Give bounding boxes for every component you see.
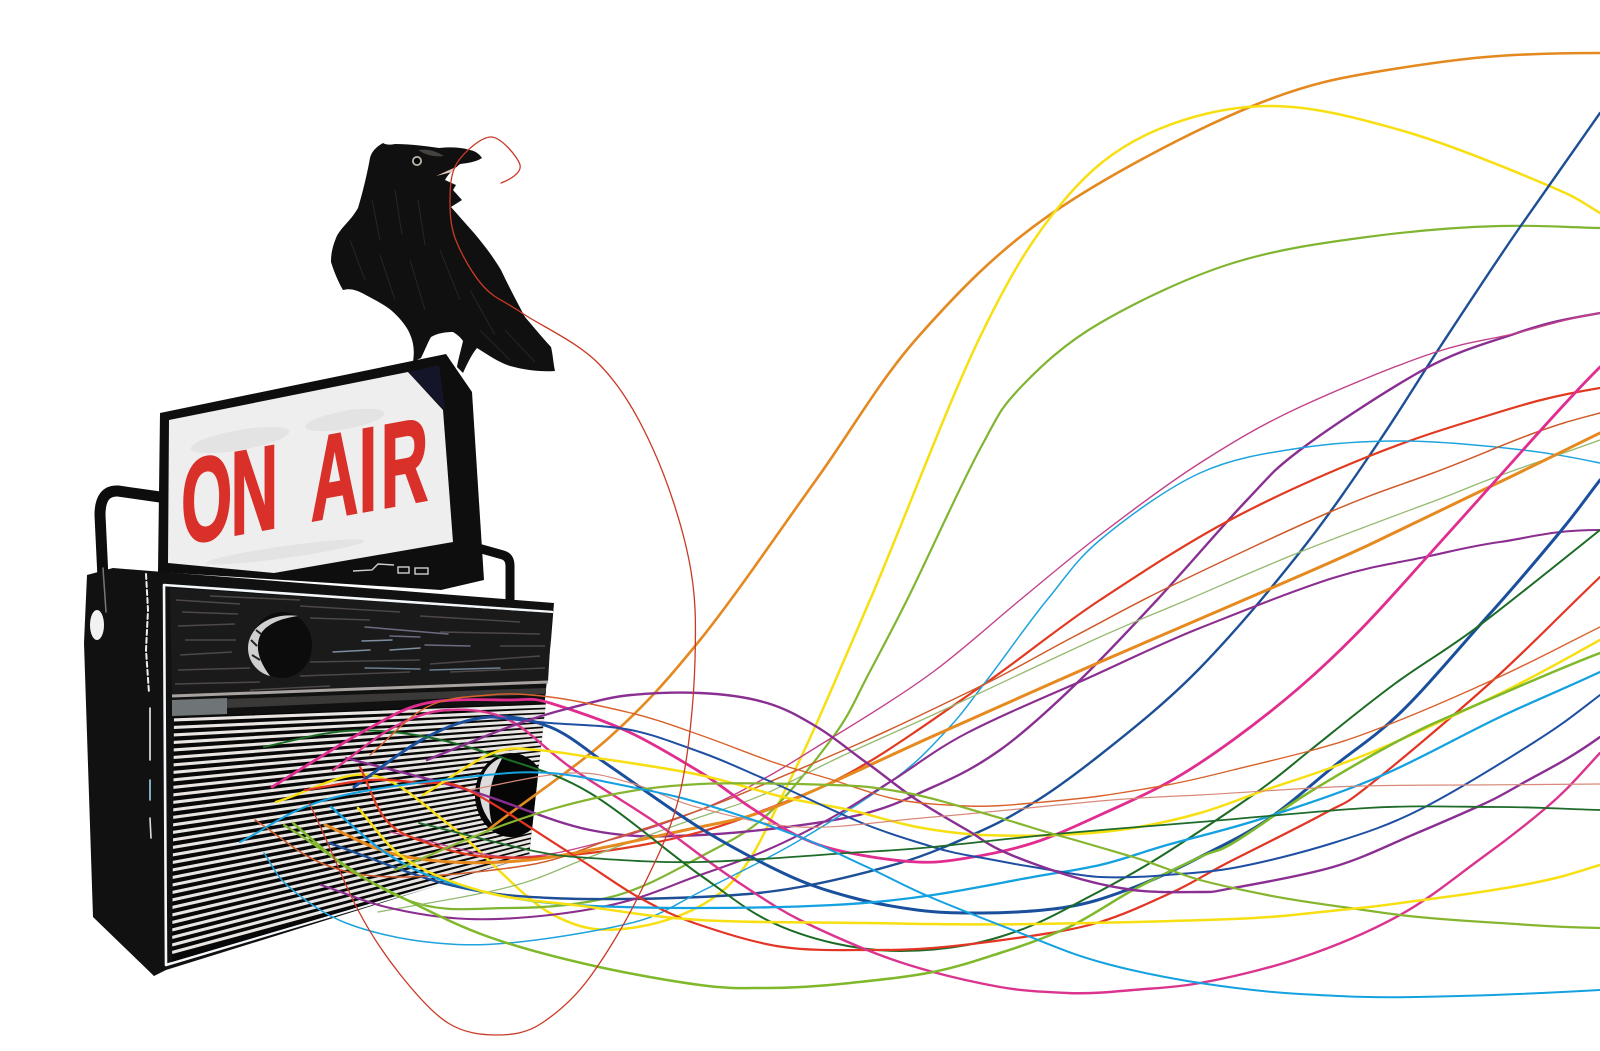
thread: green upper — [284, 226, 1600, 909]
thread: yellow bottom — [358, 808, 1600, 924]
thread: navy long — [329, 113, 1600, 899]
left radio handle — [100, 491, 160, 578]
thread: thin magenta — [390, 313, 1600, 857]
thread: orange thin arc — [370, 627, 1600, 806]
thread: navy thick — [354, 480, 1600, 913]
raven mouth — [436, 167, 456, 176]
dial markings — [333, 627, 500, 670]
thread: orange upper — [488, 53, 1600, 830]
thread: purple upper — [346, 313, 1600, 836]
upper tuning panel — [170, 588, 552, 695]
thread: light blue bottom — [240, 772, 1600, 997]
speaker grille — [172, 703, 548, 962]
thread: dark green flat — [419, 806, 1600, 862]
speaker separator — [172, 682, 548, 716]
thread: green bottom swoop — [293, 653, 1600, 988]
sign face — [168, 372, 453, 573]
thread: yellow upper — [276, 106, 1600, 930]
coloured sound threads — [240, 53, 1600, 1035]
radio — [84, 568, 554, 976]
thread: thin sage — [378, 440, 1600, 912]
thread: magenta thick — [272, 367, 1600, 862]
thread: navy thin — [489, 695, 1600, 877]
thread: yellow middle — [423, 640, 1600, 836]
thread: red from raven beak — [309, 137, 695, 1035]
thread: salmon flat — [470, 773, 1600, 827]
lower knob — [475, 753, 539, 837]
raven feather texture — [350, 190, 535, 362]
thread: red second — [305, 577, 1600, 950]
thread: purple second — [321, 530, 1600, 919]
on air sign — [158, 354, 484, 590]
sign shading — [189, 404, 386, 569]
raven head highlight — [418, 150, 444, 156]
side panel marks — [90, 568, 151, 838]
sign text: ON AIR — [181, 393, 428, 570]
thread: green bottom right — [395, 783, 1600, 928]
raven eye — [412, 156, 422, 166]
sign buttons — [353, 564, 428, 574]
upper knob — [248, 612, 312, 678]
front panel white edge — [164, 585, 552, 965]
thread: thin orange — [255, 413, 1600, 877]
thread: thin light blue upper — [264, 441, 1600, 945]
right radio handle — [478, 548, 510, 602]
raven body — [331, 143, 555, 373]
thread: orange thick low — [325, 433, 1600, 863]
thread: purple dark arc — [427, 693, 1600, 892]
radio body — [84, 568, 554, 976]
thread: red upper — [360, 388, 1600, 858]
thread: dark green — [264, 530, 1600, 951]
thread: light blue thick — [331, 672, 1600, 908]
sign frame — [158, 354, 484, 590]
raven — [331, 143, 555, 373]
sign corner fold — [408, 365, 445, 410]
thread: magenta lower — [333, 710, 1600, 993]
